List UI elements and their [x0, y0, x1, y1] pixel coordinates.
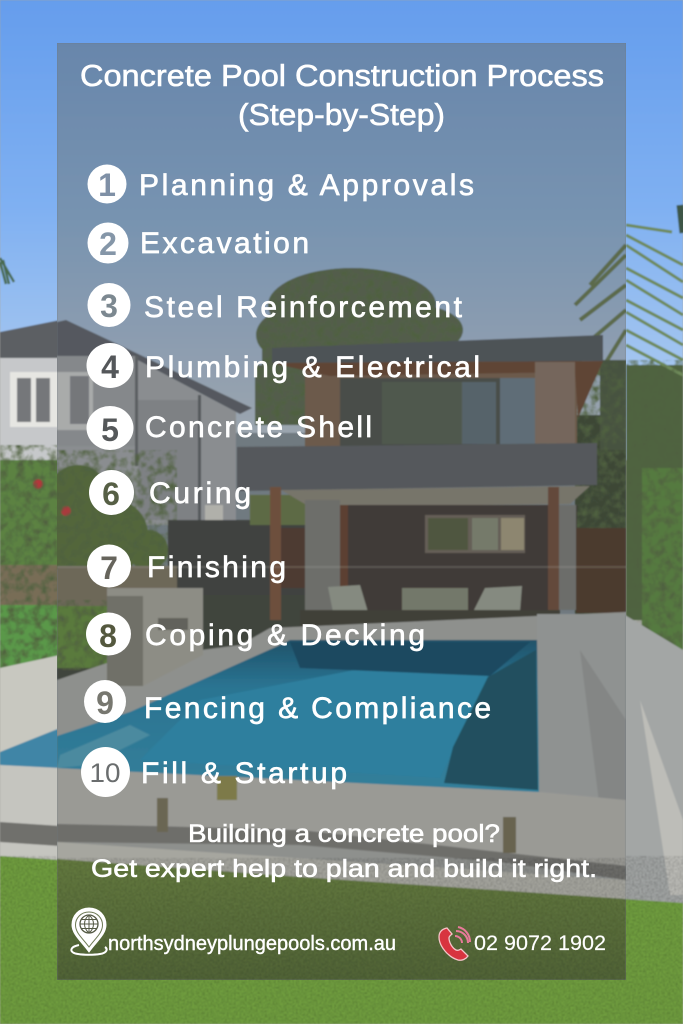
- step 4: [86, 343, 480, 388]
- step 1: 1: [98, 167, 116, 203]
- title: Concrete Pool Construction Process: [80, 58, 604, 93]
- outer left house: [0, 320, 60, 358]
- step 10: Fill & Startup: [141, 757, 347, 790]
- dimmed lawn: [57, 859, 626, 980]
- step 3: Steel Reinforcement: [144, 291, 463, 324]
- dimmed water feature: [106, 587, 204, 658]
- dimmed pool water: [57, 640, 539, 792]
- step 1: Planning & Approvals: [139, 169, 474, 202]
- step 7: Finishing: [147, 551, 286, 584]
- step 8: Coping & Decking: [145, 619, 425, 652]
- panel: translucent overlay with dimmed scene: [38, 43, 626, 980]
- step 5: Concrete Shell: [145, 411, 372, 444]
- step 9: [84, 680, 491, 725]
- dimmed deck: [57, 612, 626, 900]
- dimmed terrace furniture: [328, 584, 523, 611]
- outer right palm and hedge: [626, 365, 683, 620]
- step 2: [88, 222, 309, 264]
- step 3: 3: [100, 288, 118, 324]
- dimmed backing behind terrace: [57, 594, 306, 680]
- dimmed left shrubs and fence: [57, 464, 168, 569]
- icon: red phone: [439, 927, 470, 960]
- outer deck: [0, 655, 60, 758]
- outer left shrubs: [0, 460, 60, 565]
- step 8: 8: [99, 618, 117, 654]
- step 6: Curing: [149, 477, 251, 510]
- step 6: [89, 470, 251, 515]
- dimmed modern house: [304, 370, 578, 447]
- call to action: Get expert help to plan and build it right.: [91, 855, 597, 883]
- outer lawn: [0, 856, 683, 1024]
- dimmed sky: [57, 43, 626, 433]
- dimmed dark deck band: [57, 824, 626, 880]
- call to action: Building a concrete pool?: [188, 820, 500, 848]
- dimmed right foliage: [575, 415, 626, 615]
- step 5: [86, 406, 372, 450]
- dimmed glass posts: [157, 798, 168, 832]
- icon: location pin with globe: [71, 908, 107, 955]
- step 10: [81, 747, 347, 797]
- step 10: 10: [90, 758, 120, 788]
- step 5: 5: [101, 412, 119, 448]
- step 2: 2: [99, 226, 117, 262]
- dimmed tree behind the house: [250, 265, 465, 430]
- step 9: 9: [96, 685, 114, 721]
- title: (Step-by-Step): [238, 97, 445, 132]
- step 9: Fencing & Compliance: [144, 692, 491, 725]
- step 3: [88, 283, 463, 327]
- dimmed left house: [57, 320, 252, 414]
- outer palm fronds left: [0, 258, 14, 284]
- step 4: 4: [101, 349, 119, 385]
- call to action: [91, 820, 597, 883]
- step 2: Excavation: [140, 227, 309, 260]
- step 8: [86, 612, 425, 656]
- title: [80, 58, 604, 132]
- step 7: [87, 544, 286, 588]
- step 7: 7: [100, 550, 118, 586]
- phone number: 02 9072 1902: [474, 932, 606, 955]
- step 4: Plumbing & Electrical: [145, 351, 480, 384]
- step 6: 6: [102, 476, 120, 512]
- website: northsydneyplungepools.com.au: [108, 933, 396, 955]
